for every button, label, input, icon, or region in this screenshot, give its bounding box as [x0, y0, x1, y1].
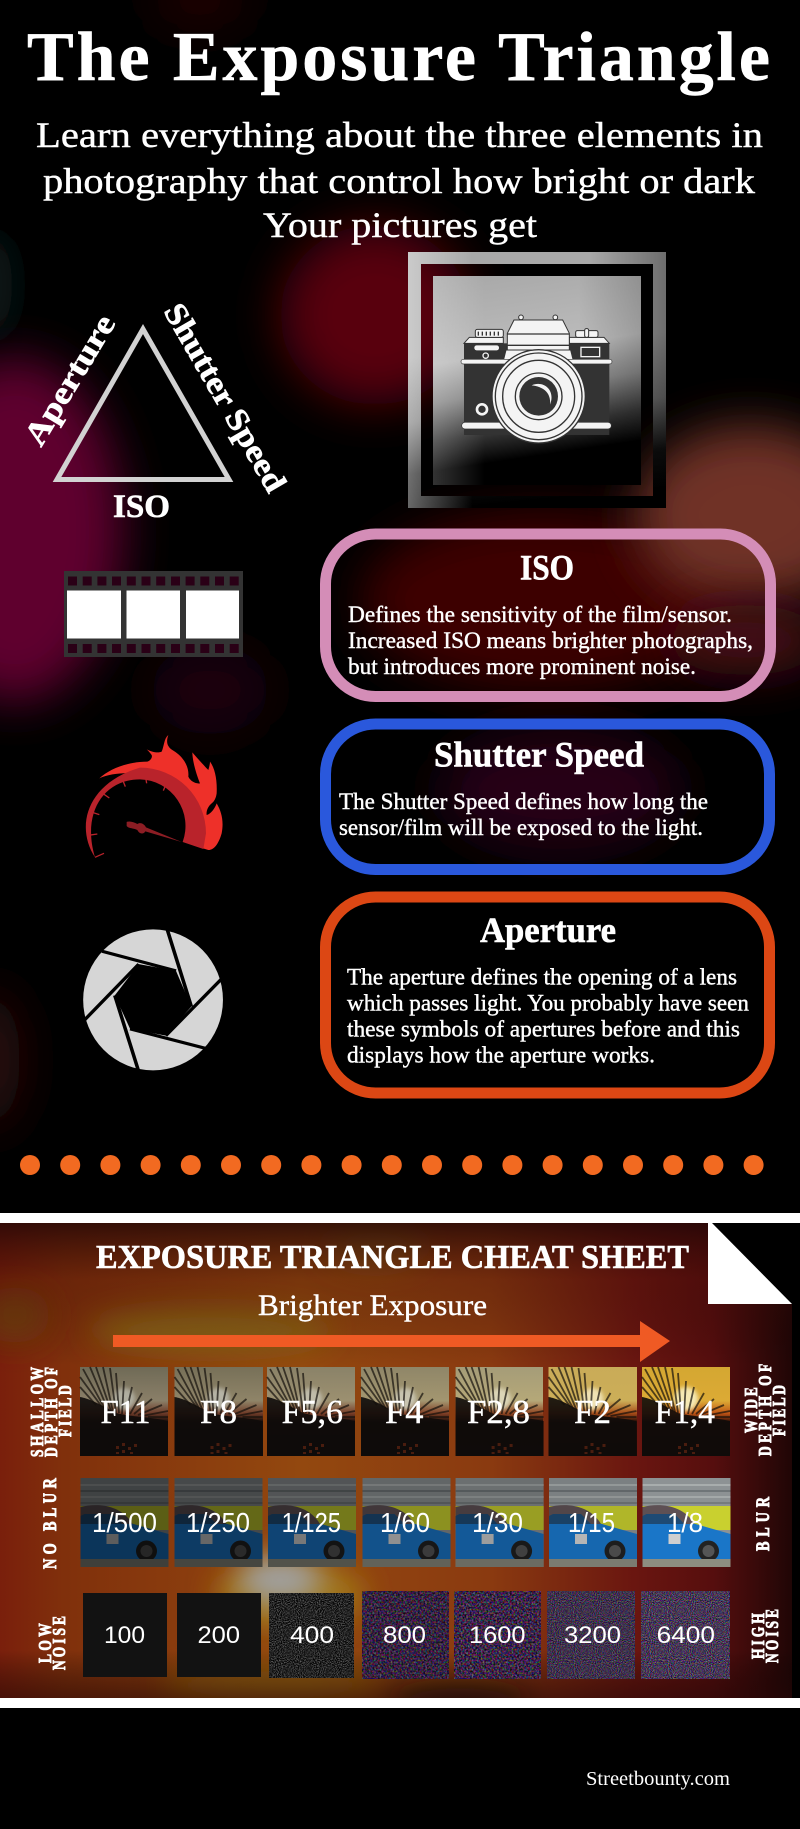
row label: shallow depth of field: [28, 1367, 76, 1457]
cheat sheet backdrop: [0, 1223, 792, 1698]
row label: high noise: HIGH: [749, 1613, 769, 1659]
Aperture description: these symbols of apertures before and this: [347, 1016, 740, 1042]
tile F8: [174, 1367, 263, 1456]
tile 200: 200: [198, 1622, 240, 1649]
tile 1/250: 1/250: [186, 1507, 250, 1538]
Shutter Speed heading: Shutter Speed: [434, 734, 644, 774]
Aperture description: which passes light. You probably have seen: [347, 990, 749, 1016]
title: The Exposure Triangle: [27, 19, 770, 96]
tile 1/60: 1/60: [380, 1507, 430, 1538]
tile 1/15: 1/15: [568, 1507, 615, 1538]
needle: [127, 821, 182, 842]
tile 100: [83, 1593, 167, 1677]
white band top: [0, 1213, 800, 1223]
tile 800: [362, 1591, 449, 1679]
tile 1/8: 1/8: [667, 1507, 703, 1538]
subtitle: Learn everything about the three elements in: [36, 115, 763, 155]
tile 1/125: 1/125: [282, 1507, 341, 1538]
tile 400: 400: [290, 1622, 334, 1649]
label: Shutter Speed: Shutter Speed: [157, 296, 294, 498]
Aperture heading: Aperture: [480, 910, 616, 950]
tile 1/8: [642, 1478, 730, 1567]
tile 6400: [641, 1591, 730, 1679]
subtitle: photography that control how bright or dark: [43, 161, 755, 201]
tile 1/250: [174, 1478, 262, 1567]
row label: blur: BLUR: [752, 1496, 774, 1551]
label: Aperture: Aperture: [16, 308, 122, 452]
tile F4: [361, 1367, 449, 1456]
ISO description: [348, 602, 753, 680]
brighter exposure label: Brighter Exposure: [258, 1289, 487, 1322]
panel: ISO: [326, 534, 770, 696]
tile 6400: 6400: [657, 1622, 715, 1649]
ISO description: Defines the sensitivity of the film/sensor.: [348, 602, 732, 628]
Shutter Speed description: [339, 789, 708, 841]
camera picture frame: [408, 252, 666, 508]
icon: camera: [461, 315, 612, 443]
label: ISO: ISO: [113, 489, 170, 525]
cheat sheet title: EXPOSURE TRIANGLE CHEAT SHEET: [96, 1239, 689, 1276]
ISO description: Increased ISO means brighter photographs,: [348, 628, 753, 654]
ISO heading: ISO: [520, 548, 574, 588]
tile F2,8: F2,8: [467, 1394, 530, 1431]
icon: film strip: [64, 571, 243, 657]
page curl: [708, 1223, 792, 1304]
white band bottom: [0, 1698, 800, 1708]
tile 800: 800: [383, 1622, 426, 1649]
icon: flaming speedometer: [86, 735, 223, 857]
tile 3200: [547, 1591, 635, 1679]
Aperture description: [347, 964, 749, 1068]
frame ring: [408, 252, 666, 508]
flame: [99, 735, 223, 850]
tile F2,8: [456, 1367, 544, 1456]
arrow: brighter exposure: [113, 1321, 670, 1362]
exposure triangle diagram: [16, 296, 294, 525]
panel: cheat sheet: [0, 1213, 800, 1716]
Aperture description: displays how the aperture works.: [347, 1042, 655, 1068]
footer credit: Streetbounty.com: [586, 1768, 730, 1790]
orange dot divider: [20, 1155, 764, 1175]
tile 1600: 1600: [469, 1622, 526, 1649]
row label: low noise: LOW: [36, 1623, 56, 1663]
tile F5,6: F5,6: [282, 1394, 343, 1431]
subtitle: [36, 115, 763, 245]
tile F5,6: [267, 1367, 355, 1456]
right black strip and page curl shadow: [708, 1223, 800, 1698]
tile F2: F2: [574, 1394, 611, 1431]
tile 1/125: [268, 1478, 356, 1567]
row label: no blur: NO BLUR: [39, 1478, 61, 1569]
row label: wide depth of field: [742, 1364, 790, 1456]
row label: shallow depth of field: SHALLOW: [28, 1367, 48, 1457]
tile 3200: 3200: [564, 1622, 621, 1649]
row: aperture f-stops: [80, 1367, 730, 1456]
row label: high noise: [749, 1609, 783, 1663]
frame picture: [433, 276, 641, 485]
film frames: [67, 590, 239, 638]
row label: wide depth of field: WIDE: [742, 1387, 762, 1433]
icon: aperture blades: [83, 929, 223, 1072]
tile 200: [177, 1593, 261, 1677]
tile 100: 100: [104, 1622, 145, 1649]
row label: wide depth of field: DEPTH OF: [756, 1364, 776, 1456]
tile 1/60: [362, 1478, 450, 1567]
row: ISO values: [83, 1591, 730, 1679]
tile 1/15: [549, 1478, 637, 1567]
tile 1/30: [456, 1478, 544, 1567]
Shutter Speed description: sensor/film will be exposed to the light.: [339, 815, 703, 841]
tile F4: F4: [385, 1394, 424, 1431]
gauge ticks: [88, 779, 165, 857]
ISO description: but introduces more prominent noise.: [348, 654, 696, 680]
row label: high noise: NOISE: [763, 1609, 783, 1663]
panel: Shutter Speed: [326, 724, 770, 870]
tile 1/500: 1/500: [92, 1507, 157, 1538]
Aperture description: The aperture defines the opening of a lens: [347, 964, 737, 990]
row label: shallow depth of field: DEPTH OF: [42, 1367, 62, 1457]
subtitle: Your pictures get: [263, 205, 537, 245]
tile 1/500: [80, 1478, 168, 1567]
row: shutter speeds: [80, 1478, 730, 1567]
tile F11: F11: [100, 1394, 150, 1431]
speedometer arc: [86, 768, 206, 857]
triangle outline: [57, 329, 229, 480]
tile F11: [80, 1367, 168, 1456]
row label: low noise: [36, 1616, 70, 1670]
film sprocket holes: [68, 576, 239, 653]
tile 1/30: 1/30: [472, 1507, 523, 1538]
tile 1600: [454, 1591, 541, 1679]
tile F8: F8: [200, 1394, 237, 1431]
tile 400: [269, 1593, 354, 1678]
tile F1,4: F1,4: [655, 1394, 715, 1431]
tile F2: [548, 1367, 637, 1456]
row label: wide depth of field: FIELD: [770, 1385, 790, 1436]
Shutter Speed description: The Shutter Speed defines how long the: [339, 789, 708, 815]
bokeh background: [0, 0, 800, 1130]
row label: shallow depth of field: FIELD: [56, 1385, 76, 1437]
row label: low noise: NOISE: [50, 1616, 70, 1670]
panel: Aperture: [326, 897, 770, 1093]
tile F1,4: [642, 1367, 730, 1456]
